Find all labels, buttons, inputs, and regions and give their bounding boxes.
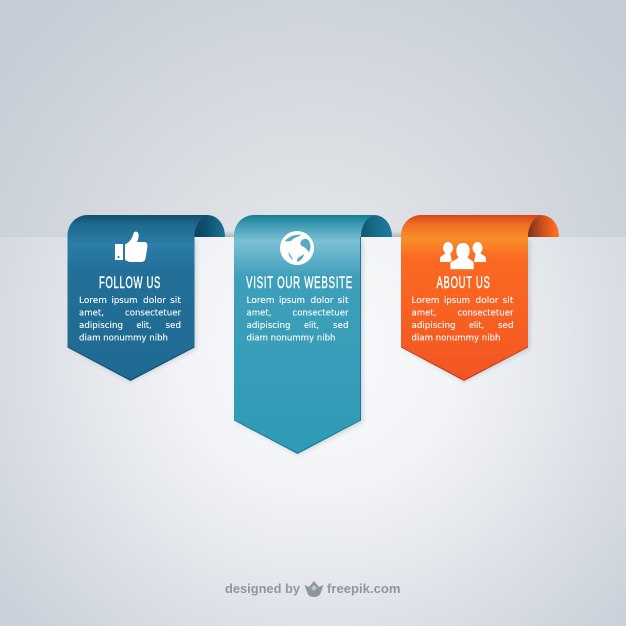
text block: about us: elit,: [469, 321, 484, 331]
ribbon tip edge: [401, 346, 528, 381]
text block: visit our website: Lorem: [246, 296, 274, 306]
text block: follow us: consectetuer: [125, 308, 181, 318]
text block: follow us: dolor: [143, 296, 166, 306]
text block: about us: Lorem: [412, 296, 440, 306]
text block: about us: ipsum: [444, 296, 470, 306]
text block: about us: amet,: [412, 308, 436, 318]
text block: visit our website: adipiscing: [246, 321, 290, 331]
text block: visit our website: ipsum: [279, 296, 305, 306]
background: shelf surface: [0, 237, 626, 626]
ribbon: follow us: [68, 215, 225, 382]
heading: visit our website: VISIT OUR WEBSITE: [246, 274, 353, 292]
text block: visit our website: diam nonummy nibh: [246, 334, 336, 344]
icon: thumbs up: [115, 232, 147, 262]
text block: about us: [412, 296, 514, 344]
heading: follow us: FOLLOW US: [99, 274, 161, 292]
footer credit: freepik.com: [327, 581, 400, 596]
ribbon: about us: [401, 215, 559, 382]
text block: visit our website: amet,: [246, 308, 272, 318]
ribbon: visit our website: [234, 215, 392, 455]
text block: follow us: diam nonummy nibh: [79, 334, 168, 344]
text block: visit our website: dolor: [310, 296, 334, 306]
icon: globe: [280, 231, 314, 265]
text block: about us: adipiscing: [412, 321, 456, 331]
shelf edge shadow: [222, 231, 236, 237]
text block: follow us: elit,: [136, 321, 152, 331]
ribbon tip edge: [234, 420, 361, 454]
text block: about us: consectetuer: [458, 308, 514, 318]
icon: people: [440, 242, 486, 270]
ribbon tip edge: [68, 346, 194, 381]
footer credit: designed by: [225, 582, 300, 596]
background: wall: [0, 0, 626, 238]
ribbon curl: [190, 215, 225, 237]
ribbon curl: [523, 215, 559, 237]
text block: follow us: sit: [170, 296, 182, 306]
text block: follow us: amet,: [79, 308, 104, 318]
text block: visit our website: elit,: [304, 321, 319, 331]
text block: visit our website: sit: [338, 296, 349, 306]
ribbon front: [401, 215, 542, 380]
text block: about us: diam nonummy nibh: [412, 334, 500, 344]
ribbon front: [68, 215, 208, 380]
text block: visit our website: consectetuer: [292, 308, 349, 318]
icon: freepik crown: [304, 581, 324, 597]
ribbon curl: [356, 215, 392, 237]
ribbon front: [234, 215, 374, 453]
text block: visit our website: [246, 296, 349, 344]
footer credit: [225, 581, 400, 597]
text block: follow us: sed: [166, 321, 181, 331]
text block: follow us: adipiscing: [79, 321, 123, 331]
text block: about us: sit: [502, 296, 514, 306]
text block: follow us: [79, 296, 182, 344]
text block: visit our website: sed: [333, 321, 348, 331]
text block: follow us: ipsum: [112, 296, 138, 306]
text block: about us: sed: [498, 321, 514, 331]
text block: about us: dolor: [476, 296, 499, 306]
text block: follow us: Lorem: [79, 296, 107, 306]
heading: about us: ABOUT US: [436, 274, 490, 292]
